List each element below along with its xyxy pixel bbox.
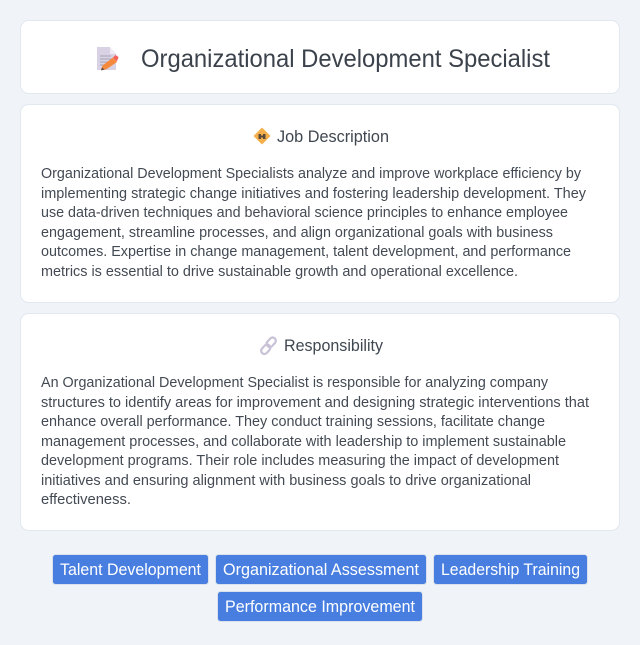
text block: responsibility: effectiveness. xyxy=(41,492,131,508)
tag: leadership training xyxy=(434,554,588,584)
text block: responsibility: initiatives and ensuring alignment with business goals to drive organizational xyxy=(41,473,531,489)
text block: job description: implementing strategic change initiatives and fostering leadership development. They xyxy=(41,186,587,202)
text block: job description: outcomes. Expertise in change management, talent development, and performance xyxy=(41,244,571,260)
text block: responsibility: enhance overall performance. They conduct training sessions, facilitate change xyxy=(41,414,545,430)
title: Organizational Development Specialist xyxy=(141,45,550,73)
heading: responsibility: Responsibility xyxy=(284,336,384,355)
tag: talent development xyxy=(52,554,208,584)
text block: job description: use data-driven techniques and behavioral science principles to enhance employee xyxy=(41,205,568,221)
text block: job description: metrics is essential to drive sustainable growth and operational excellence. xyxy=(41,264,518,280)
text block: responsibility: development programs. Their role includes measuring the impact of development xyxy=(41,453,559,469)
panel: title card xyxy=(20,20,620,94)
tag: talent development: Talent Development xyxy=(60,560,201,579)
panel: responsibility xyxy=(20,314,620,530)
text block: responsibility xyxy=(41,375,589,508)
icon: document with pencil xyxy=(97,47,118,70)
tag: organizational assessment xyxy=(216,554,426,584)
icon: job description diamond xyxy=(254,128,270,144)
text block: responsibility: An Organizational Development Specialist is responsible for analyzing company xyxy=(41,375,549,391)
text block: job description xyxy=(41,166,587,280)
text block: job description: engagement, streamline processes, and align organizational goals with business xyxy=(41,225,553,241)
tag: leadership training: Leadership Training xyxy=(441,560,580,579)
tag: organizational assessment: Organizational Assessment xyxy=(223,560,419,579)
tag: performance improvement: Performance Improvement xyxy=(225,597,415,616)
text block: responsibility: structures to identify areas for improvement and designing strategic interventions that xyxy=(41,395,589,411)
text block: responsibility: management processes, and collaborate with leadership to implement sustainable xyxy=(41,434,566,450)
panel: job description xyxy=(20,104,620,302)
icon: chain link xyxy=(260,336,277,355)
heading: job description: Job Description xyxy=(277,127,389,146)
text block: job description: Organizational Development Specialists analyze and improve workplace efficiency by xyxy=(41,166,582,182)
tag: performance improvement xyxy=(218,592,422,622)
